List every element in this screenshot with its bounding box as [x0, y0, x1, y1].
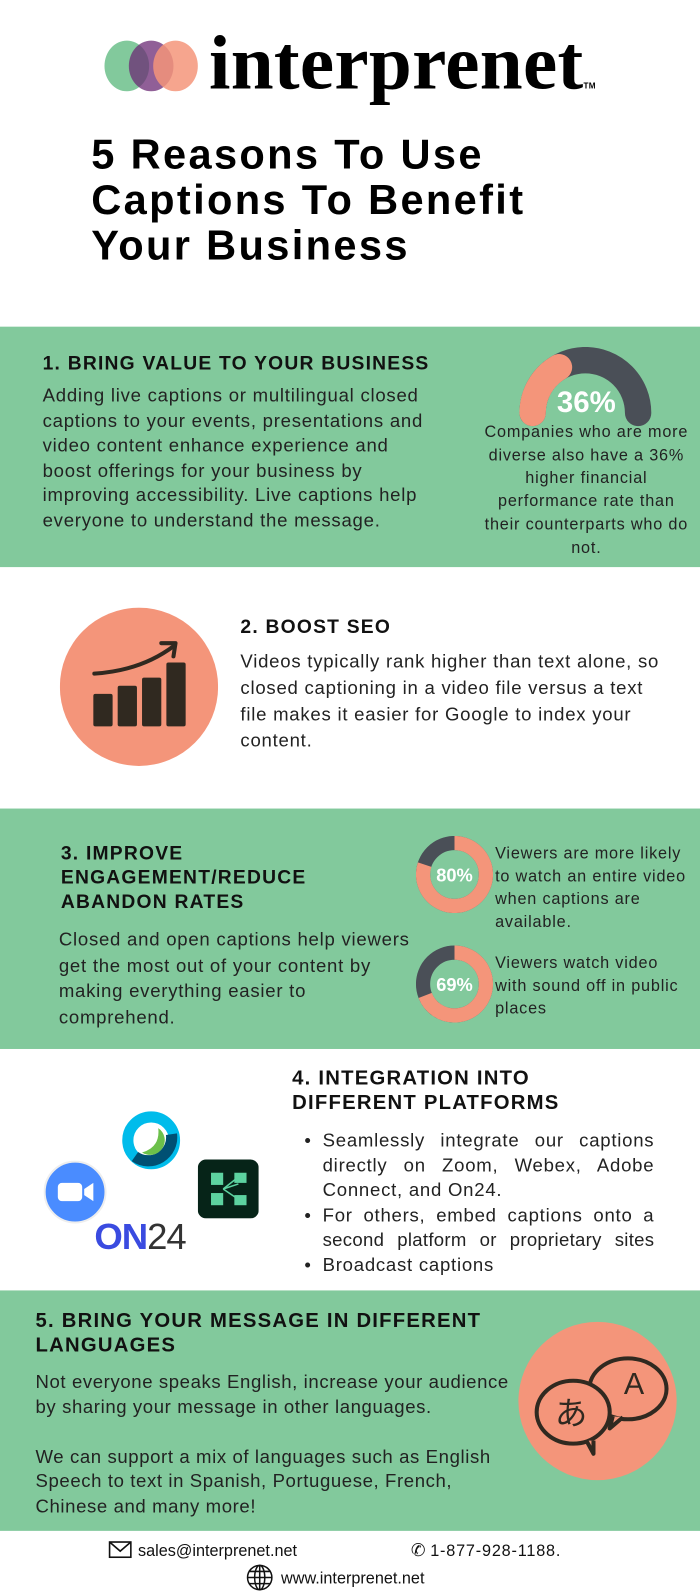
- panel: 1 bring value: [0, 327, 700, 567]
- heading 5: [36, 1310, 481, 1356]
- icon: zoom: [44, 1160, 106, 1224]
- text 2: content.: [240, 729, 313, 751]
- icon: webex: [122, 1111, 180, 1170]
- donut 80%: [416, 836, 493, 913]
- panel: 5 languages: [0, 1290, 700, 1531]
- stat text 80: [495, 845, 686, 931]
- bullet list: Broadcast captions: [323, 1253, 494, 1275]
- heading 3: ENGAGEMENT/REDUCE: [61, 867, 306, 889]
- logo wordmark: interprenetTM: [209, 20, 596, 106]
- bullet list: For others, embed captions onto a: [323, 1204, 654, 1225]
- panel: 3 engagement: [0, 809, 700, 1049]
- stat caption 1: [484, 424, 688, 556]
- heading 4: 4. INTEGRATION INTO: [292, 1067, 530, 1090]
- text 5: Not everyone speaks English, increase your audience: [36, 1371, 509, 1392]
- text 2: file makes it easier for Google to index your: [240, 703, 631, 724]
- heading 5: LANGUAGES: [36, 1334, 176, 1356]
- stat caption 1: their counterparts who do: [485, 516, 688, 533]
- text 5: [36, 1371, 509, 1516]
- website: www.interprenet.net: [281, 1570, 424, 1588]
- heading 3: 3. IMPROVE: [61, 843, 183, 864]
- text 3: get the most out of your content by: [59, 954, 371, 975]
- icon: adobe connect: [198, 1160, 259, 1218]
- gauge 36%: [519, 347, 652, 426]
- text 1: captions to your events, presentations and: [43, 409, 423, 431]
- stat caption 1: performance rate than: [498, 493, 675, 510]
- text 5: by sharing your message in other languages.: [36, 1395, 432, 1417]
- stat text 69: Viewers watch video: [495, 955, 658, 972]
- text 2: [240, 650, 659, 751]
- logo: [104, 20, 596, 106]
- title: Your Business: [91, 222, 410, 269]
- title: [91, 131, 525, 269]
- panel: 4 integration: [44, 1067, 654, 1275]
- footer contacts: [108, 1541, 561, 1590]
- icon: language bubbles: あ: [555, 1387, 587, 1434]
- logo: on24: ON24: [94, 1215, 186, 1257]
- bullet list: directly on Zoom, Webex, Adobe: [323, 1154, 654, 1175]
- bullet list: second platform or proprietary sites: [323, 1229, 654, 1250]
- bullet list: Connect, and On24.: [323, 1179, 502, 1200]
- donut 69%: [416, 946, 493, 1023]
- website: [246, 1564, 424, 1590]
- icon: growth chart: [60, 608, 218, 766]
- icon: language bubbles: A: [624, 1367, 645, 1401]
- stat text 69: places: [495, 1001, 547, 1018]
- text 1: [42, 384, 423, 530]
- bullet list: Seamlessly integrate our captions: [323, 1129, 654, 1150]
- heading 5: 5. BRING YOUR MESSAGE IN DIFFERENT: [36, 1310, 481, 1332]
- text 1: Adding live captions or multilingual closed: [43, 384, 419, 406]
- logo mark: [104, 40, 198, 92]
- heading 4: [292, 1067, 560, 1114]
- heading 3: ABANDON RATES: [61, 892, 244, 913]
- stat caption 1: not.: [571, 539, 602, 556]
- text 3: Closed and open captions help viewers: [59, 928, 410, 950]
- stat caption 1: higher financial: [525, 470, 647, 487]
- heading 1: 1. BRING VALUE TO YOUR BUSINESS: [43, 353, 430, 374]
- platform logos: [44, 1111, 259, 1257]
- stat text 80: when captions are: [495, 891, 641, 908]
- text 3: comprehend.: [59, 1006, 175, 1027]
- stat text 69: [495, 955, 678, 1018]
- bullet list: [304, 1129, 654, 1275]
- text 5: We can support a mix of languages such as English: [36, 1445, 491, 1466]
- stat caption 1: diverse also have a 36%: [489, 447, 684, 464]
- title: 5 Reasons To Use: [91, 131, 484, 178]
- heading 3: [61, 843, 306, 913]
- phone: ✆ 1-877-928-1188.: [411, 1541, 561, 1560]
- text 3: [59, 928, 410, 1028]
- stat text 80: Viewers are more likely: [495, 845, 681, 862]
- bullet list: •: [304, 1204, 312, 1225]
- text 2: Videos typically rank higher than text alone, so: [240, 650, 659, 672]
- email: sales@interprenet.net: [138, 1543, 297, 1560]
- donut 69%: 69%: [436, 974, 473, 995]
- stat caption 1: Companies who are more: [485, 424, 688, 441]
- text 5: Chinese and many more!: [36, 1495, 256, 1516]
- text 1: everyone to understand the message.: [43, 509, 381, 530]
- text 1: boost offerings for your business by: [43, 459, 362, 480]
- text 1: video content enhance experience and: [43, 434, 389, 456]
- bullet list: •: [304, 1129, 312, 1150]
- bullet list: •: [304, 1253, 312, 1275]
- text 5: Speech to text in Spanish, Portuguese, French,: [36, 1470, 452, 1491]
- stat text 80: to watch an entire video: [495, 868, 686, 885]
- text 1: improving accessibility. Live captions help: [43, 484, 417, 505]
- heading 2: 2. BOOST SEO: [240, 617, 391, 638]
- stat text 80: available.: [495, 914, 572, 931]
- donut 80%: 80%: [436, 865, 473, 886]
- title: Captions To Benefit: [91, 177, 525, 223]
- panel: 2 boost seo: [60, 608, 659, 766]
- heading 4: DIFFERENT PLATFORMS: [292, 1092, 560, 1114]
- gauge 36%: 36%: [557, 386, 616, 419]
- text 3: making everything easier to: [59, 980, 306, 1001]
- stat text 69: with sound off in public: [495, 978, 678, 995]
- icon: language bubbles: [518, 1322, 677, 1480]
- text 2: closed captioning in a video file versus a text: [240, 677, 643, 698]
